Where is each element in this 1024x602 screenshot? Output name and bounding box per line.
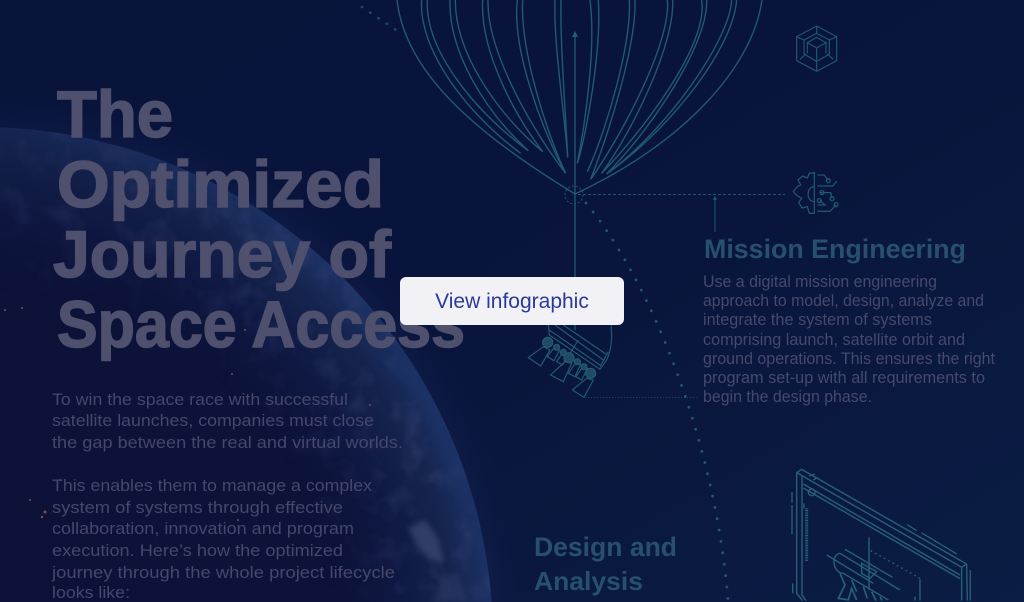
heading: design and analysis: Design and xyxy=(534,532,677,562)
text: mission engineering xyxy=(703,273,995,406)
intro text: satellite launches, companies must close xyxy=(52,411,374,430)
icon: gear with circuit xyxy=(793,173,838,213)
intro text: To win the space race with successful xyxy=(52,390,348,409)
intro text: collaboration, innovation and program xyxy=(52,519,354,538)
connector: balloon to mission engineering xyxy=(565,186,785,232)
button: view infographic xyxy=(400,277,624,325)
text: mission engineering: ground operations. This ensures the right xyxy=(703,350,995,368)
intro text: looks like: xyxy=(52,583,130,602)
title: Space Access xyxy=(57,287,465,361)
title xyxy=(53,77,465,361)
text: mission engineering: approach to model, design, analyze and xyxy=(703,292,984,310)
dotted trajectory xyxy=(362,7,728,600)
intro text: journey through the whole project lifecycle xyxy=(51,563,395,582)
text: mission engineering: integrate the system of systems xyxy=(703,311,932,329)
text: mission engineering: begin the design phase. xyxy=(703,388,872,406)
title: The xyxy=(57,77,173,151)
title: Journey of xyxy=(53,217,392,291)
icon: cube xyxy=(797,26,837,71)
rocket xyxy=(528,310,697,398)
text: mission engineering: Use a digital mission engineering xyxy=(703,273,937,291)
planet earth xyxy=(0,126,492,602)
monitor illustration xyxy=(792,469,970,601)
vertical arrow xyxy=(572,31,578,330)
intro text xyxy=(51,390,403,602)
text: mission engineering: comprising launch, satellite orbit and xyxy=(703,331,965,349)
intro text: This enables them to manage a complex xyxy=(52,476,373,495)
text: mission engineering: program set-up with all requirements to xyxy=(703,369,985,387)
title: Optimized xyxy=(57,147,384,221)
heading: design and analysis: Analysis xyxy=(534,566,643,596)
balloon xyxy=(397,0,762,194)
heading: design and analysis xyxy=(534,532,677,596)
button: view infographic: View infographic xyxy=(435,290,589,313)
intro text: system of systems through effective xyxy=(52,498,343,517)
heading: mission engineering: Mission Engineering xyxy=(704,234,966,264)
intro text: the gap between the real and virtual worlds. xyxy=(52,433,403,452)
intro text: execution. Here’s how the optimized xyxy=(52,541,343,560)
